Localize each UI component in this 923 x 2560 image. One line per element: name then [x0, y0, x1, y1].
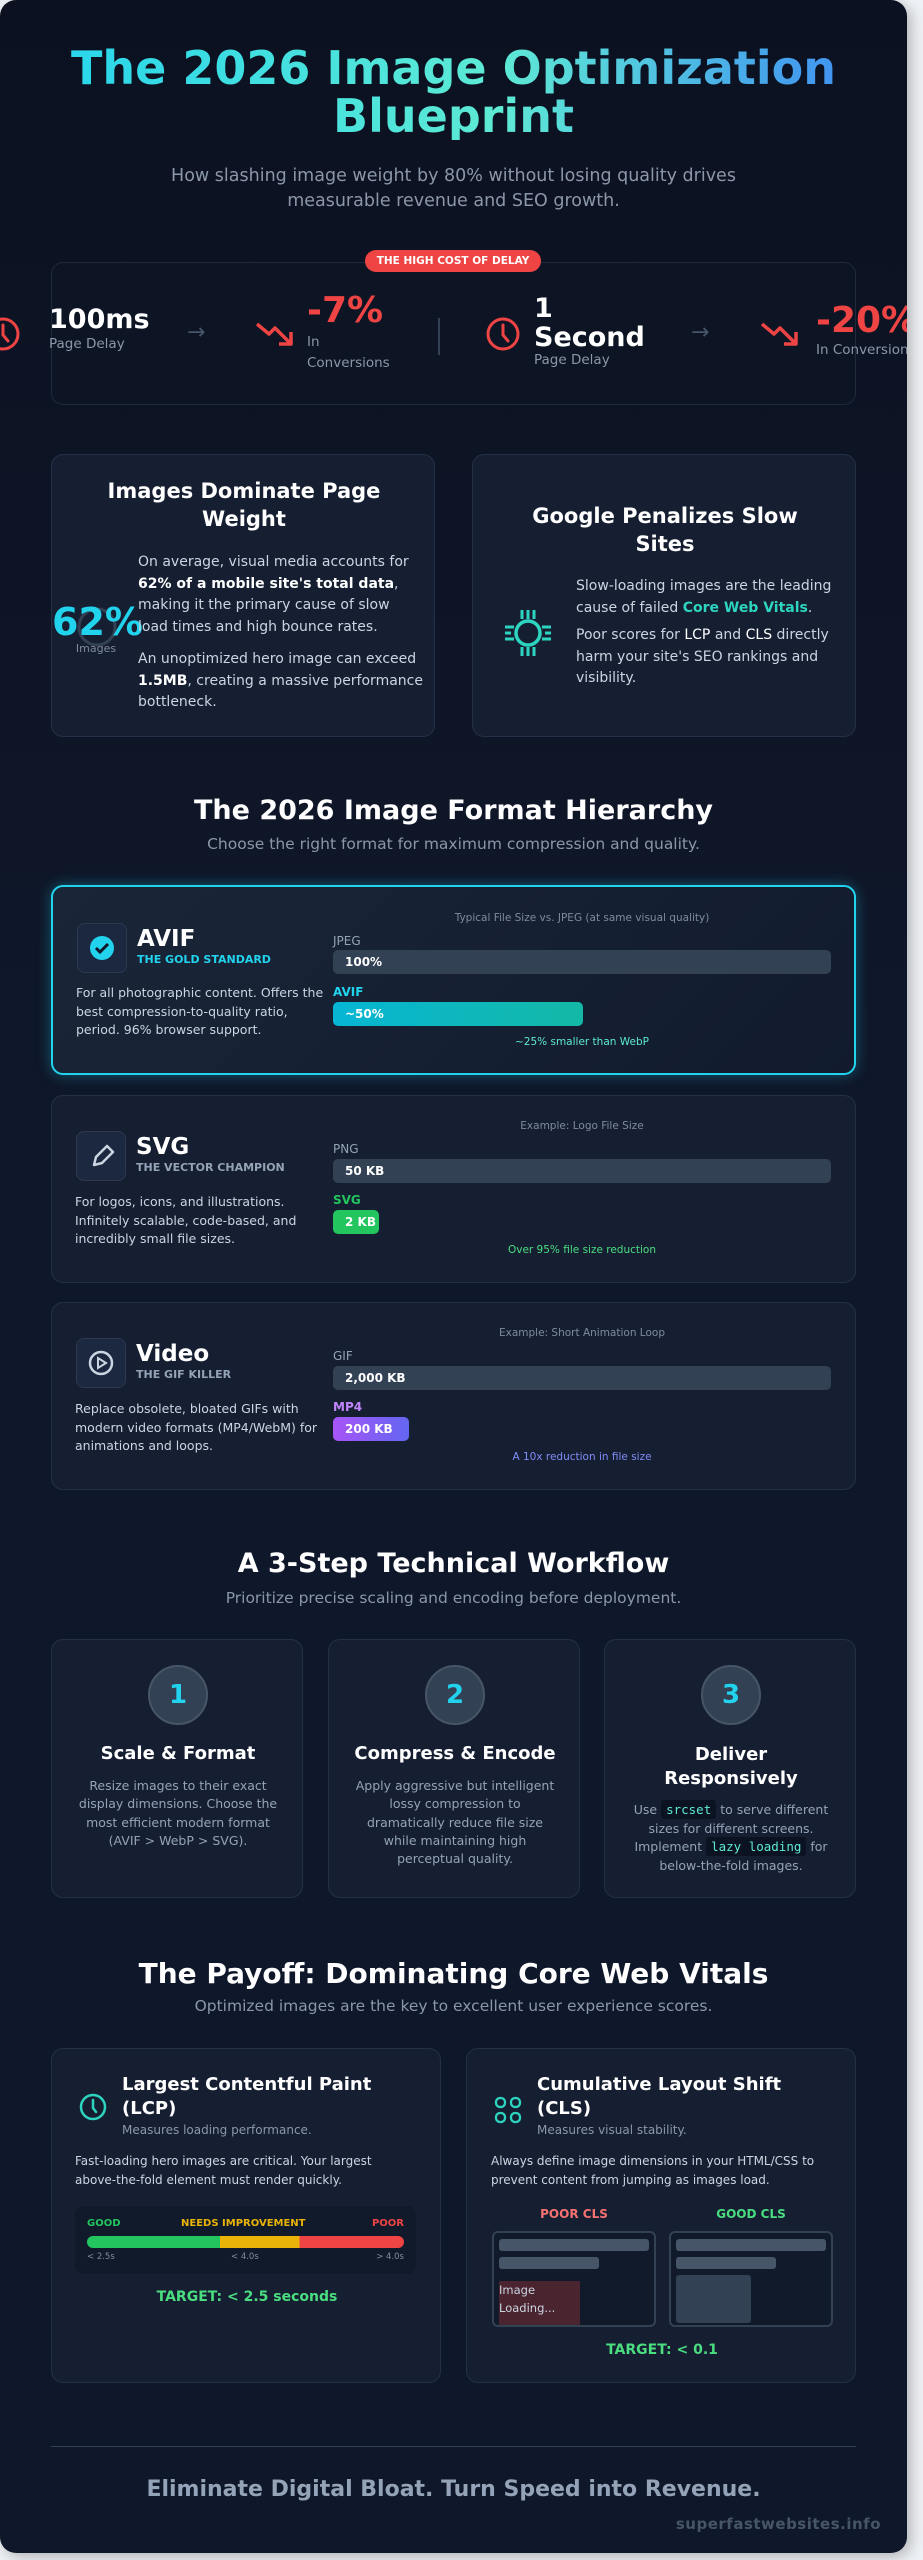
description: Replace obsolete, bloated GIFs with modern video formats (MP4/WebM) for animations and loops. — [75, 1401, 317, 1453]
name: SVG — [136, 1134, 189, 1160]
icon: trend down 2 — [760, 322, 798, 346]
title: Largest Contentful Paint — [122, 2074, 371, 2095]
scale chart: NEEDS IMPROVEMENT — [181, 2218, 306, 2229]
chart: Over 95% file size reduction — [508, 1244, 656, 1256]
scale chart — [75, 2206, 416, 2274]
name: AVIF — [137, 926, 195, 952]
text: Slow-loading images are the leading cause of failed Core Web Vitals. Poor scores for LCP and CLS directly harm your site's SEO rankings and visibility. — [576, 578, 831, 686]
chart: A 10x reduction in file size — [512, 1451, 652, 1463]
chart: ~50% — [345, 1007, 384, 1021]
subtitle — [171, 166, 736, 211]
title: (LCP) — [122, 2098, 176, 2119]
stat: 100ms: Page Delay — [49, 336, 125, 352]
panel: images dominate — [51, 454, 435, 737]
chart — [333, 1120, 831, 1256]
step text: Resize images to their exact display dimensions. Choose the most efficient modern format (AVIF > WebP > SVG). — [79, 1778, 277, 1848]
target: TARGET: < 0.1 — [606, 2342, 718, 2358]
title: The 2026 Image Optimization — [71, 41, 836, 95]
step text: Apply aggressive but intelligent lossy compression to dramatically reduce file size while maintaining high perceptual quality. — [356, 1778, 554, 1866]
stat: 1 second: 1 — [534, 293, 553, 324]
name: THE VECTOR CHAMPION — [136, 1161, 285, 1174]
chart: Example: Logo File Size — [520, 1120, 644, 1132]
chart: MP4 — [333, 1400, 362, 1414]
chart: 50 KB — [345, 1164, 384, 1178]
panel: AVIF — [51, 885, 856, 1075]
scale chart: < 2.5s — [87, 2252, 115, 2262]
arrow 1: → — [187, 320, 205, 345]
chart: Typical File Size vs. JPEG (at same visual quality) — [455, 912, 709, 924]
title: Blueprint — [333, 89, 574, 143]
stat: -7%: In — [307, 334, 320, 350]
number 2: 2 — [446, 1680, 464, 1710]
divider — [438, 318, 440, 355]
chart: 2 KB — [345, 1215, 376, 1229]
step title: Responsively — [664, 1768, 798, 1789]
step title: Scale & Format — [101, 1743, 255, 1764]
good CLS demo — [669, 2207, 833, 2327]
heading: core web vitals: The Payoff: Dominating Core Web Vitals — [139, 1957, 768, 1990]
step title — [664, 1744, 798, 1789]
good CLS demo: GOOD CLS — [716, 2207, 786, 2221]
stat: 100ms — [49, 304, 150, 352]
chart: 100% — [345, 955, 382, 969]
panel: step 1 — [51, 1639, 303, 1898]
subtitle: How slashing image weight by 80% without losing quality drives — [171, 166, 736, 186]
heading — [108, 479, 380, 531]
chart: ~25% smaller than WebP — [515, 1036, 649, 1048]
chart: PNG — [333, 1142, 359, 1156]
title — [0, 44, 907, 140]
icon: check — [77, 923, 127, 973]
chart: GIF — [333, 1349, 353, 1363]
poor CLS demo: POOR CLS — [540, 2207, 608, 2221]
panel: step 3 — [604, 1639, 856, 1898]
heading: Google Penalizes Slow — [532, 504, 798, 528]
chart: 2,000 KB — [345, 1371, 406, 1385]
chart: SVG — [333, 1193, 361, 1207]
title: Cumulative Layout Shift — [537, 2074, 781, 2095]
poor CLS demo: Image — [499, 2283, 535, 2297]
panel: Video — [51, 1302, 856, 1490]
subheading: Choose the right format for maximum compression and quality. — [207, 835, 700, 853]
text: On average, visual media accounts for 62% of a mobile site's total data, making it the primary cause of slow load times and high bounce rates. An unoptimized hero image can exceed 1.5MB, creating a massive performance bottleneck. — [138, 554, 423, 710]
heading: Weight — [202, 507, 286, 531]
scale chart: > 4.0s — [376, 2252, 404, 2262]
scale chart: POOR — [372, 2218, 404, 2229]
name — [136, 1341, 231, 1381]
stat ring 62%: Images — [76, 642, 116, 655]
title: Measures visual stability. — [537, 2123, 687, 2137]
stat: -7%: Conversions — [307, 355, 390, 371]
icon: play — [76, 1338, 126, 1388]
icon: pencil — [76, 1131, 126, 1181]
name: THE GOLD STANDARD — [137, 953, 271, 966]
step title: Compress & Encode — [354, 1743, 556, 1764]
scale chart: < 4.0s — [231, 2252, 259, 2262]
chart: Example: Short Animation Loop — [499, 1327, 665, 1339]
panel: cost of delay — [51, 262, 856, 405]
arrow 2: → — [691, 320, 709, 345]
subheading: Optimized images are the key to excellent user experience scores. — [195, 1997, 712, 2015]
title: (CLS) — [537, 2098, 591, 2119]
number 3 — [701, 1665, 761, 1725]
heading: Images Dominate Page — [108, 479, 380, 503]
stat ring 62%: 62% — [52, 600, 143, 644]
panel: step 2 — [328, 1639, 580, 1898]
number 3: 3 — [722, 1680, 740, 1710]
panel: LCP — [51, 2048, 441, 2383]
description: For all photographic content. Offers the best compression-to-quality ratio, period. 96% browser support. — [76, 985, 323, 1037]
title: Measures loading performance. — [122, 2123, 312, 2137]
stat: -7% — [307, 290, 390, 371]
stat: 1 second — [534, 293, 645, 368]
text: Fast-loading hero images are critical. Your largest above-the-fold element must render quickly. — [75, 2154, 372, 2186]
icon: chip — [505, 610, 551, 656]
number 2 — [425, 1665, 485, 1725]
icon: trend down 1 — [256, 322, 293, 346]
footer tagline: Eliminate Digital Bloat. Turn Speed into Revenue. — [146, 2477, 761, 2502]
icon: clock 2 — [486, 318, 520, 350]
chart: AVIF — [333, 985, 363, 999]
heading: format hierarchy: The 2026 Image Format Hierarchy — [194, 795, 713, 826]
scale chart: GOOD — [87, 2218, 121, 2229]
badge: high cost of delay: THE HIGH COST OF DELAY — [377, 255, 529, 267]
text: Always define image dimensions in your HTML/CSS to prevent content from jumping as images load. — [491, 2154, 814, 2186]
badge: high cost of delay — [365, 250, 541, 272]
panel: google penalizes — [472, 454, 856, 737]
step title: Deliver — [695, 1744, 767, 1765]
chart — [332, 912, 831, 1048]
panel: CLS — [466, 2048, 856, 2383]
name — [137, 926, 271, 966]
number 1: 1 — [169, 1680, 187, 1710]
poor CLS demo: Loading... — [499, 2301, 555, 2315]
stat: -7%: -7% — [307, 290, 383, 331]
chart — [333, 1327, 831, 1463]
heading: Sites — [635, 532, 695, 556]
target: TARGET: < 2.5 seconds — [157, 2289, 337, 2305]
subheading: Prioritize precise scaling and encoding before deployment. — [226, 1589, 681, 1607]
title — [122, 2074, 371, 2137]
description: For logos, icons, and illustrations. Infinitely scalable, code-based, and incredibly small file sizes. — [75, 1194, 296, 1246]
name — [136, 1134, 285, 1174]
step text: Use srcset to serve different sizes for different screens. Implement lazy loading for below-the-fold images. — [634, 1802, 828, 1873]
stat: 1 second: Second — [534, 322, 645, 353]
icon: clock 1 — [0, 318, 20, 350]
heading — [532, 504, 798, 556]
stat: 100ms: 100ms — [49, 304, 150, 335]
poor CLS demo — [492, 2207, 656, 2327]
title — [537, 2074, 781, 2137]
name: Video — [136, 1341, 209, 1367]
footer url: superfastwebsites.info — [676, 2515, 881, 2533]
name: THE GIF KILLER — [136, 1368, 231, 1381]
subtitle: measurable revenue and SEO growth. — [287, 191, 620, 211]
chart: 200 KB — [345, 1422, 393, 1436]
icon: clock — [80, 2094, 106, 2120]
heading: workflow: A 3-Step Technical Workflow — [238, 1548, 669, 1579]
chart: JPEG — [333, 934, 361, 948]
number 1 — [148, 1665, 208, 1725]
panel: SVG — [51, 1095, 856, 1283]
icon: grid — [494, 2096, 522, 2124]
stat: 1 second: Page Delay — [534, 352, 610, 368]
